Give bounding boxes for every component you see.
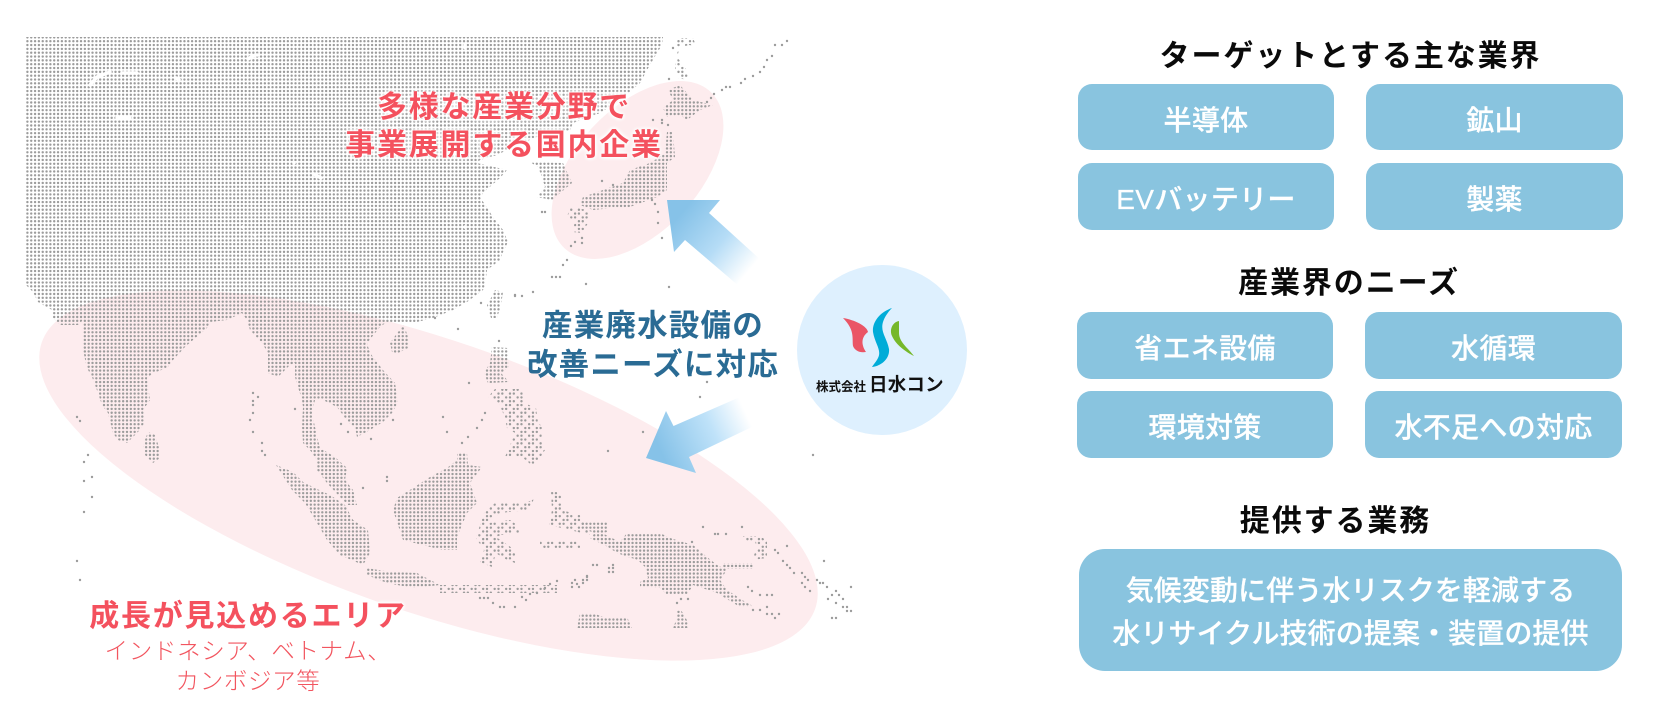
- panel: services provided: [1079, 505, 1622, 671]
- heading: domestic companies: 事業展開する国内企業: [345, 129, 663, 162]
- heading: 産業界のニーズ: [1238, 267, 1460, 300]
- tag: environmental measures: 環境対策: [1148, 412, 1262, 443]
- center callout: 産業廃水設備の: [542, 309, 764, 343]
- tag: water shortage: [1365, 391, 1622, 458]
- service description: 気候変動に伴う水リスクを軽減する: [1126, 575, 1575, 606]
- tag: energy-saving equipment: 省エネ設備: [1134, 333, 1276, 364]
- text: growth area countries: インドネシア、ベトナム、: [105, 638, 391, 664]
- heading: growth area: 成長が見込めるエリア: [89, 600, 407, 633]
- highlight ellipse: Japan: [519, 49, 756, 291]
- service description: [1079, 549, 1622, 671]
- highlight ellipse: Southeast Asia: [0, 214, 859, 715]
- scattered island dots: [77, 41, 851, 618]
- heading: domestic companies: [344, 88, 663, 162]
- center callout: 改善ニーズに対応: [527, 348, 779, 382]
- panel: target industries: [1078, 40, 1623, 230]
- map graphic: [26, 37, 967, 660]
- logo text: 株式会社日水コン: [816, 374, 944, 395]
- tag: EV battery: EVバッテリー: [1116, 184, 1296, 215]
- center callout: [527, 309, 779, 382]
- logo circle: [797, 265, 967, 435]
- tag: mining: 鉱山: [1466, 104, 1523, 136]
- tag: water circulation: 水循環: [1451, 333, 1536, 364]
- heading: ターゲットとする主な業界: [1160, 40, 1541, 73]
- tag: mining: [1366, 84, 1623, 150]
- tag: water circulation: [1365, 312, 1622, 379]
- tag: energy-saving equipment: [1077, 312, 1333, 379]
- arrow: toward Southeast Asia: [646, 397, 754, 473]
- heading: domestic companies: 多様な産業分野で: [377, 91, 631, 124]
- dotted land masses: [26, 37, 852, 628]
- tag: environmental measures: [1077, 391, 1333, 458]
- tag: semiconductors: [1078, 84, 1334, 150]
- tag: pharmaceuticals: 製薬: [1466, 184, 1523, 215]
- tag: semiconductors: 半導体: [1164, 104, 1248, 136]
- logo mark: [843, 308, 914, 367]
- text: growth area countries: [105, 638, 391, 694]
- heading: 提供する業務: [1240, 505, 1431, 538]
- tag: water shortage: 水不足への対応: [1394, 412, 1593, 443]
- panel: industry needs: [1077, 266, 1622, 458]
- arrow: toward Japan: [667, 200, 763, 287]
- tag: pharmaceuticals: [1366, 163, 1623, 230]
- service description: 水リサイクル技術の提案・装置の提供: [1112, 618, 1589, 649]
- text: growth area countries: カンボジア等: [176, 668, 320, 694]
- white gaps: inland lakes: [90, 45, 465, 235]
- tag: EV battery: [1078, 163, 1334, 230]
